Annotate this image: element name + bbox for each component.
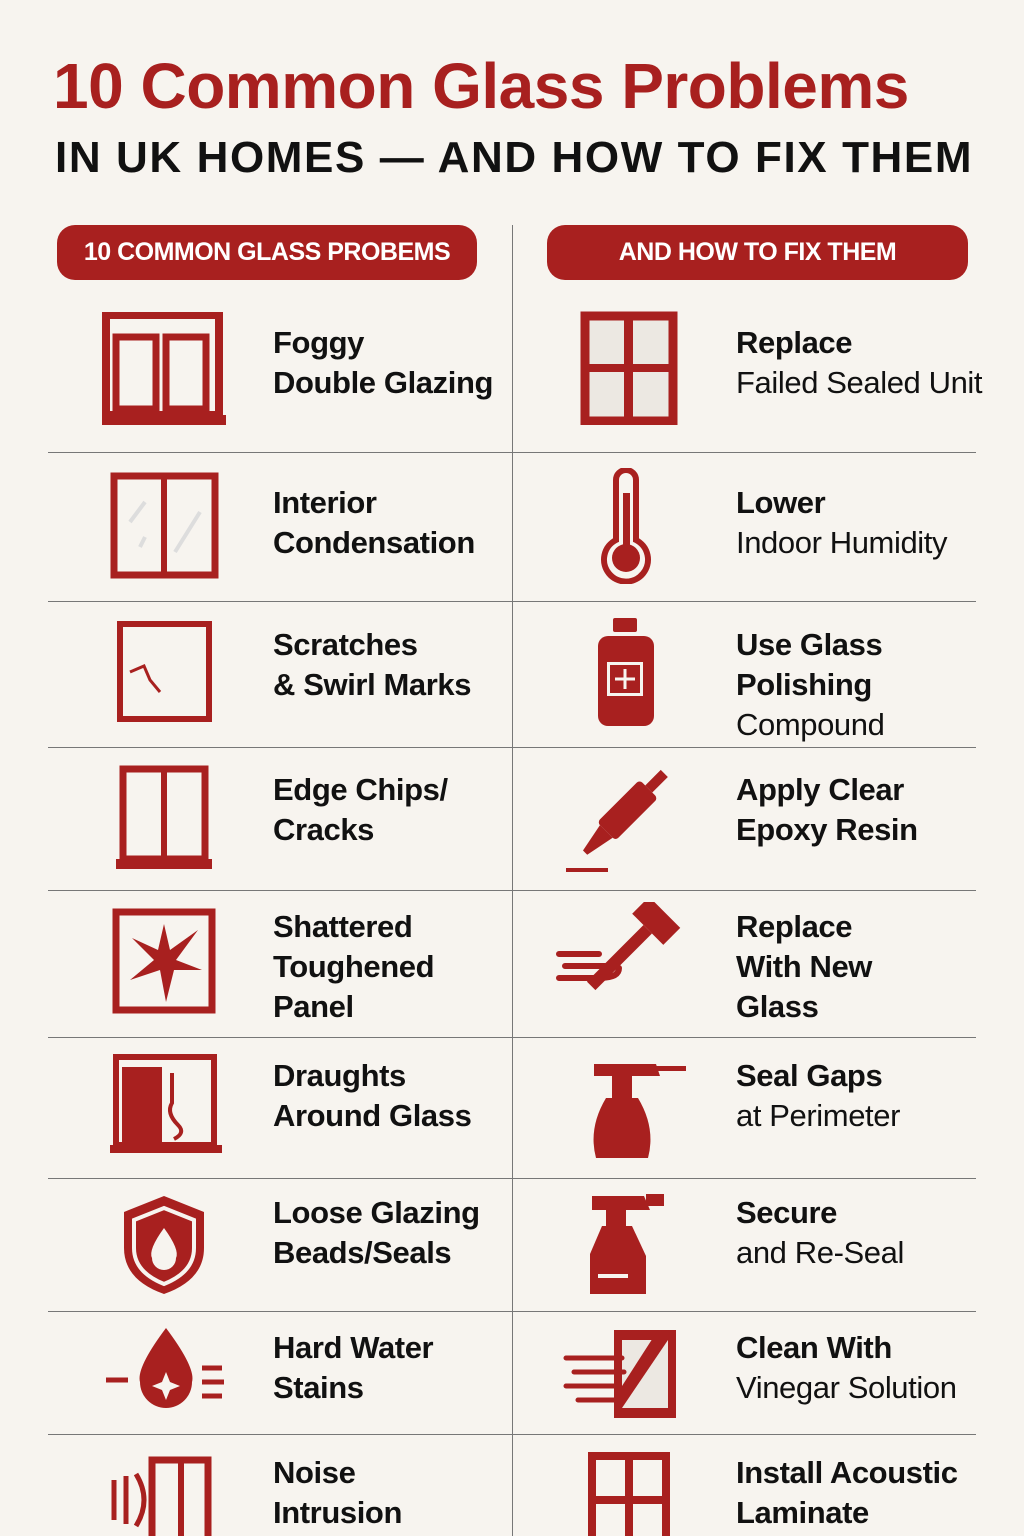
text: edge chips/cracks [273, 772, 448, 847]
text: shattered toughened panel [273, 909, 434, 1024]
text: hard water stains: Hard Water [273, 1330, 433, 1365]
text: foggy double glazing: Double Glazing [273, 365, 493, 400]
text: use glass polishing compound: Use Glass [736, 627, 882, 662]
icon: chipped window [116, 766, 212, 869]
icon: cleaning pane with wind [564, 1330, 676, 1418]
icon: thermometer [601, 468, 651, 584]
text: replace failed sealed unit: Failed Sealed Unit [736, 365, 982, 400]
text: draughts around glass [273, 1058, 471, 1133]
text: apply clear epoxy resin [736, 772, 918, 847]
text: noise intrusion: Intrusion [273, 1495, 402, 1530]
text: install acoustic laminate: Install Acoustic [736, 1455, 958, 1490]
icon: resin syringe [566, 770, 668, 872]
text: draughts around glass: Draughts [273, 1058, 406, 1093]
icon: spray bottle 2 [590, 1194, 664, 1294]
icon: noise window [112, 1456, 212, 1536]
text: edge chips/cracks: Cracks [273, 812, 374, 847]
icon: polish bottle [598, 618, 654, 726]
text: hard water stains: Stains [273, 1370, 364, 1405]
text: shattered toughened panel: Toughened [273, 949, 434, 984]
text: interior condensation [273, 485, 475, 560]
text: clean with vinegar solution: Clean With [736, 1330, 892, 1365]
subtitle: IN UK HOMES — AND HOW TO FIX THEM [55, 133, 973, 182]
pill: fixes header [547, 225, 968, 280]
text: replace with new glass [736, 909, 872, 1024]
text: use glass polishing compound [736, 627, 884, 742]
text: apply clear epoxy resin: Apply Clear [736, 772, 904, 807]
text: clean with vinegar solution: Vinegar Solution [736, 1370, 957, 1405]
text: loose glazing beads/seals [273, 1195, 480, 1270]
icon: draughty window [110, 1054, 222, 1153]
text: noise intrusion [273, 1455, 402, 1530]
icon: hammer with wind [556, 902, 680, 990]
text: secure and re-seal: Secure [736, 1195, 837, 1230]
text: seal gaps at perimeter [736, 1058, 900, 1133]
icon: spray bottle [594, 1064, 686, 1158]
icon: scratched pane [117, 621, 212, 722]
text: install acoustic laminate [736, 1455, 958, 1530]
text: shattered toughened panel: Panel [273, 989, 354, 1024]
text: secure and re-seal [736, 1195, 904, 1270]
text: scratches & swirl marks: & Swirl Marks [273, 667, 471, 702]
text: secure and re-seal: and Re-Seal [736, 1235, 904, 1270]
text: loose glazing beads/seals: Beads/Seals [273, 1235, 451, 1270]
text: apply clear epoxy resin: Epoxy Resin [736, 812, 918, 847]
text: replace failed sealed unit: Replace [736, 325, 852, 360]
text: foggy double glazing [273, 325, 493, 400]
icon: double glazed window [102, 312, 226, 425]
pill: fixes header: AND HOW TO FIX THEM [619, 238, 896, 266]
text: edge chips/cracks: Edge Chips/ [273, 772, 448, 807]
icon: shield with drop [124, 1196, 204, 1294]
text: install acoustic laminate: Laminate [736, 1495, 869, 1530]
text: replace failed sealed unit [736, 325, 982, 400]
pill: problems header [57, 225, 477, 280]
text: use glass polishing compound: Compound [736, 707, 884, 742]
icon: acoustic laminate window [588, 1452, 670, 1536]
text: interior condensation: Condensation [273, 525, 475, 560]
icon: shattered panel [112, 908, 216, 1014]
icon: water drop stains [106, 1328, 224, 1408]
text: foggy double glazing: Foggy [273, 325, 364, 360]
title: 10 Common Glass Problems [53, 50, 909, 122]
text: noise intrusion: Noise [273, 1455, 355, 1490]
text: replace with new glass: With New [736, 949, 872, 984]
text: scratches & swirl marks: Scratches [273, 627, 418, 662]
text: loose glazing beads/seals: Loose Glazing [273, 1195, 480, 1230]
text: hard water stains [273, 1330, 434, 1405]
pill: problems header: 10 COMMON GLASS PROBEMS [84, 238, 450, 266]
text: replace with new glass: Glass [736, 989, 818, 1024]
text: seal gaps at perimeter: Seal Gaps [736, 1058, 882, 1093]
text: scratches & swirl marks [273, 627, 471, 702]
text: clean with vinegar solution [736, 1330, 957, 1405]
text: seal gaps at perimeter: at Perimeter [736, 1098, 900, 1133]
text: lower indoor humidity [736, 485, 948, 560]
text: lower indoor humidity: Indoor Humidity [736, 525, 947, 560]
text: lower indoor humidity: Lower [736, 485, 825, 520]
text: use glass polishing compound: Polishing [736, 667, 872, 702]
text: draughts around glass: Around Glass [273, 1098, 471, 1133]
icon: four-pane window [580, 312, 678, 425]
text: shattered toughened panel: Shattered [273, 909, 412, 944]
text: replace with new glass: Replace [736, 909, 852, 944]
icon: condensation window [110, 472, 218, 578]
text: interior condensation: Interior [273, 485, 377, 520]
